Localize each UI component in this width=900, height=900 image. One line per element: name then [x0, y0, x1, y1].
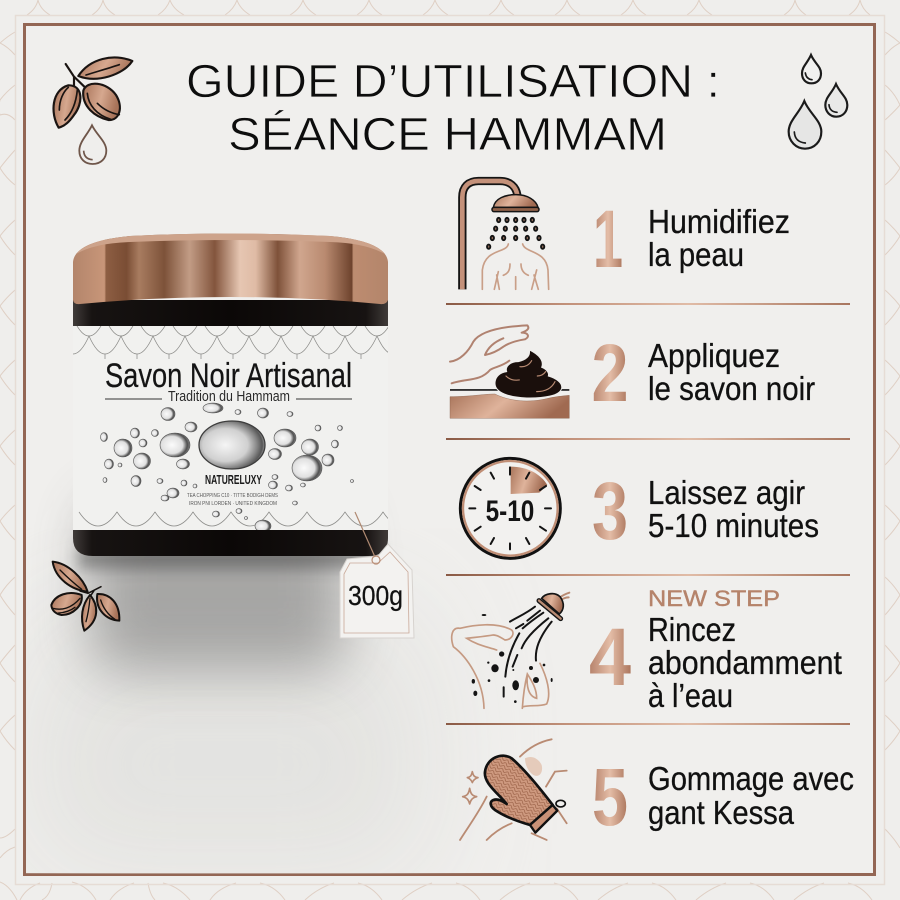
label subtitle: Tradition du Hammam — [168, 388, 290, 405]
icon: water drops — [789, 55, 847, 149]
step 1 — [462, 181, 790, 289]
step text: à l’eau — [648, 677, 733, 714]
step text: Appliquez — [648, 337, 780, 374]
step text — [648, 203, 790, 273]
divider — [446, 303, 850, 305]
number 4: 4 — [589, 612, 631, 703]
number 5: 5 — [592, 752, 628, 843]
icon: argan branch and drop — [54, 58, 132, 128]
icon: rinsing shower head — [452, 593, 569, 708]
step text: la peau — [648, 236, 744, 273]
divider — [446, 574, 850, 576]
step text: Rincez — [648, 611, 736, 648]
label brand: NATURELUXY — [205, 472, 262, 487]
jar body — [73, 300, 388, 556]
number 2: 2 — [592, 328, 628, 419]
step text: abondamment — [648, 644, 842, 681]
step text — [648, 760, 854, 831]
icon: hand and black soap — [450, 325, 569, 418]
icon: small oil drop — [79, 125, 106, 164]
step 5 — [460, 739, 854, 843]
jar lid — [73, 234, 388, 304]
number 1: 1 — [593, 194, 623, 285]
label scallops — [73, 326, 388, 526]
lid top rim — [76, 234, 385, 254]
step text: Humidifiez — [648, 203, 790, 240]
label title: Savon Noir Artisanal — [105, 357, 352, 395]
step text: Laissez agir — [648, 474, 805, 511]
step text: 5-10 minutes — [648, 507, 819, 544]
product jar — [73, 234, 388, 556]
step text — [648, 611, 842, 714]
divider — [446, 723, 850, 725]
label — [73, 326, 388, 530]
step 2 — [450, 325, 815, 419]
icon: bottom left argan branch — [51, 562, 119, 631]
step text — [648, 474, 819, 544]
icon: shower — [462, 181, 549, 289]
title: GUIDE D’UTILISATION : — [186, 55, 720, 107]
icon: timer: 5-10 — [486, 495, 534, 528]
weight tag: 300g — [348, 580, 403, 611]
step text: Gommage avec — [648, 760, 854, 797]
weight tag — [340, 512, 414, 638]
new step label: NEW STEP — [648, 586, 780, 611]
title: SÉANCE HAMMAM — [228, 108, 667, 160]
label small print: IRON PNI LORDEN · UNITED KINGDOM — [189, 501, 277, 507]
step text: gant Kessa — [648, 794, 795, 831]
jar shadow — [26, 500, 426, 874]
step 4 — [452, 586, 842, 714]
label small print — [187, 493, 278, 507]
title — [186, 55, 720, 160]
number 3: 3 — [592, 466, 628, 557]
water droplets — [100, 403, 354, 532]
step text — [648, 337, 815, 407]
step 3 — [460, 458, 819, 558]
label small print: TEA CHOPPING C10 · TITTE BODIGH DEMS — [187, 493, 278, 499]
icon: timer — [460, 458, 560, 558]
step text: le savon noir — [648, 370, 815, 407]
divider — [446, 438, 850, 440]
icon: kessa glove — [460, 739, 567, 840]
